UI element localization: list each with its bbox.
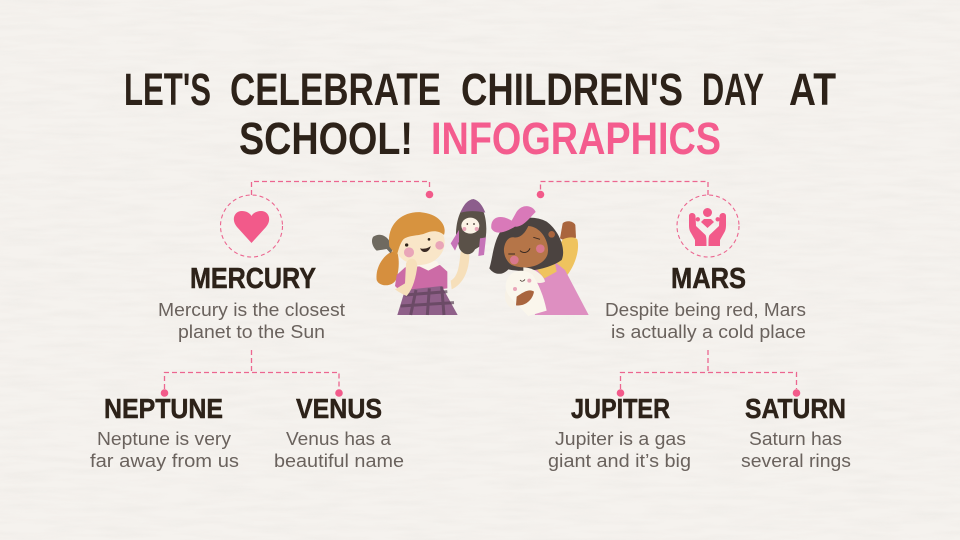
text: Mercury description: planet to the Sun (178, 322, 325, 342)
block: Venus: beautiful name (274, 451, 404, 471)
block: Saturn: SATURN (745, 393, 846, 424)
text: Mercury description (158, 300, 345, 342)
block: Saturn: Saturn has (749, 429, 842, 449)
text: Mars description: Despite being red, Mars (605, 300, 806, 320)
icon: hands holding family in dashed circle (677, 195, 739, 257)
connector: Mars to illustration (537, 182, 708, 198)
connector: Mars to Jupiter and Saturn (617, 350, 800, 397)
block: Jupiter: JUPITER (571, 393, 670, 424)
title: CHILDREN'S (461, 64, 683, 115)
illustration: two children (372, 199, 589, 316)
block: Jupiter: giant and it’s big (548, 451, 691, 471)
heading: Mars (605, 263, 806, 342)
heading: Mercury: MERCURY (190, 263, 316, 295)
block: Neptune: NEPTUNE (104, 393, 223, 424)
text: Mars description (605, 300, 806, 342)
text: Mars description: is actually a cold place (611, 322, 806, 342)
title: LET'S (124, 64, 211, 115)
connector: Mercury to illustration (252, 182, 433, 198)
title (124, 64, 836, 164)
block: Venus: VENUS (296, 393, 382, 424)
title: DAY (702, 64, 764, 115)
block: Jupiter: Jupiter is a gas (555, 429, 686, 449)
block: Jupiter (548, 393, 691, 471)
block: Saturn: several rings (741, 451, 851, 471)
block: Venus: Venus has a (286, 429, 392, 449)
girl with bunny (489, 206, 589, 315)
title: SCHOOL! (239, 113, 413, 164)
text: Mercury description: Mercury is the closest (158, 300, 345, 320)
block: Neptune (90, 393, 239, 471)
block: Neptune: far away from us (90, 451, 239, 471)
title: INFOGRAPHICS (431, 113, 721, 164)
block: Neptune: Neptune is very (97, 429, 231, 449)
heading: Mercury (158, 263, 345, 342)
connector: Mercury to Neptune and Venus (161, 350, 343, 397)
girl with rocket puppet (372, 212, 469, 315)
bunny toy (505, 267, 547, 316)
title: AT (789, 64, 836, 115)
rocket puppet (451, 199, 486, 256)
title: CELEBRATE (230, 64, 441, 115)
block: Venus (274, 393, 404, 471)
heading: Mars: MARS (671, 263, 746, 295)
block: Saturn (741, 393, 851, 471)
icon: heart in dashed circle (220, 195, 282, 257)
